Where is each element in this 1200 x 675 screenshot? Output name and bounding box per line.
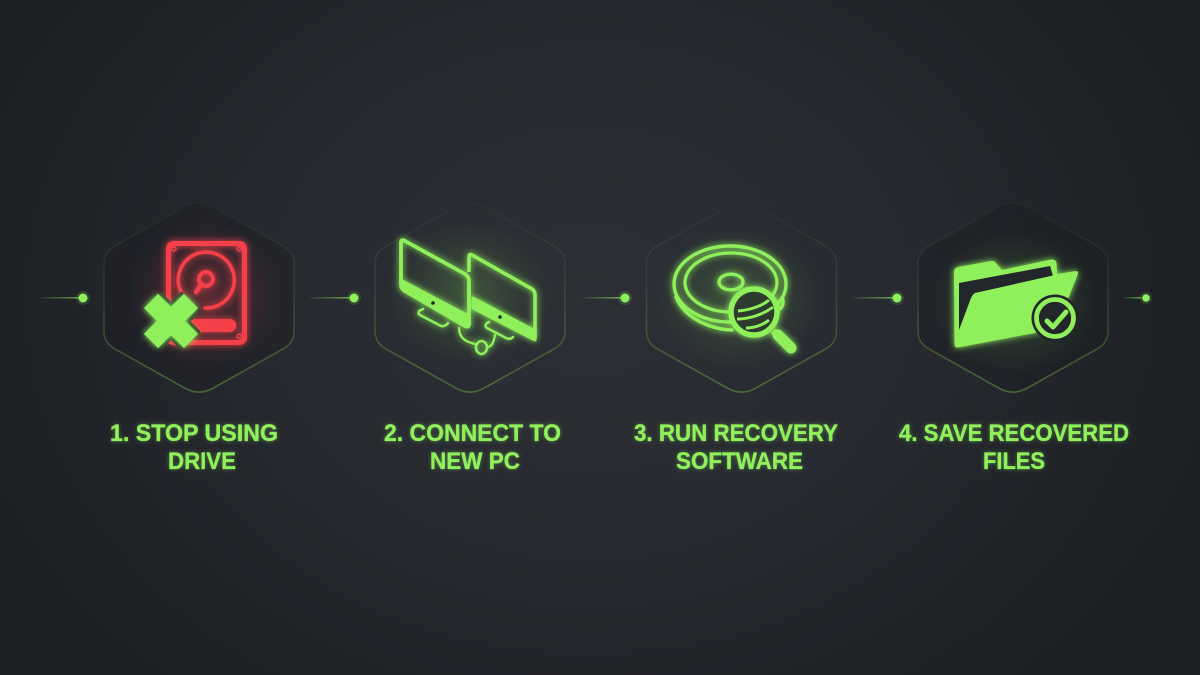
hexagon frame 1 bbox=[104, 203, 294, 392]
label: step 4 bbox=[899, 420, 1129, 475]
monitor left bbox=[401, 240, 469, 327]
label: step 1: DRIVE bbox=[168, 448, 236, 475]
connector: step 3 to 4 bbox=[853, 291, 904, 305]
panel: step 2 bbox=[375, 203, 565, 475]
connector: after step 4 bbox=[1123, 292, 1152, 304]
icon: disk under magnifier bbox=[674, 246, 791, 348]
hexagon frame 3 bbox=[646, 203, 836, 392]
label: step 2 bbox=[384, 420, 561, 475]
glow behind folder bbox=[930, 231, 1100, 375]
icon: folder with check badge bbox=[954, 259, 1078, 348]
label: step 4: FILES bbox=[983, 448, 1045, 475]
connector: step 2 to 3 bbox=[583, 291, 632, 305]
panel: step 3 bbox=[634, 203, 838, 475]
label: step 2: 2. CONNECT TO bbox=[384, 420, 561, 447]
glow behind disk bbox=[653, 226, 823, 370]
panel: step 1 bbox=[104, 203, 294, 475]
cable bbox=[459, 328, 475, 344]
label: step 1 bbox=[110, 420, 278, 475]
glow behind drive bbox=[127, 220, 283, 370]
glow behind monitors bbox=[383, 220, 553, 364]
connector: step 1 to 2 bbox=[310, 291, 361, 305]
monitor right bbox=[469, 255, 535, 338]
icon: green cross bbox=[151, 301, 191, 341]
hexagon frame 4 bbox=[918, 203, 1108, 392]
label: step 2: NEW PC bbox=[430, 448, 520, 475]
icon: failed hard drive bbox=[168, 244, 244, 342]
label: step 3 bbox=[634, 420, 838, 475]
label: step 1: 1. STOP USING bbox=[110, 420, 278, 447]
label: step 3: SOFTWARE bbox=[676, 448, 803, 475]
label: step 3: 3. RUN RECOVERY bbox=[634, 420, 838, 447]
label: step 4: 4. SAVE RECOVERED bbox=[899, 420, 1129, 447]
panel: step 4 bbox=[899, 203, 1129, 475]
icon: two connected monitors bbox=[401, 240, 535, 354]
magnifier bbox=[731, 289, 777, 335]
hexagon frame 2 bbox=[375, 203, 565, 392]
connector: before step 1 bbox=[40, 291, 90, 305]
